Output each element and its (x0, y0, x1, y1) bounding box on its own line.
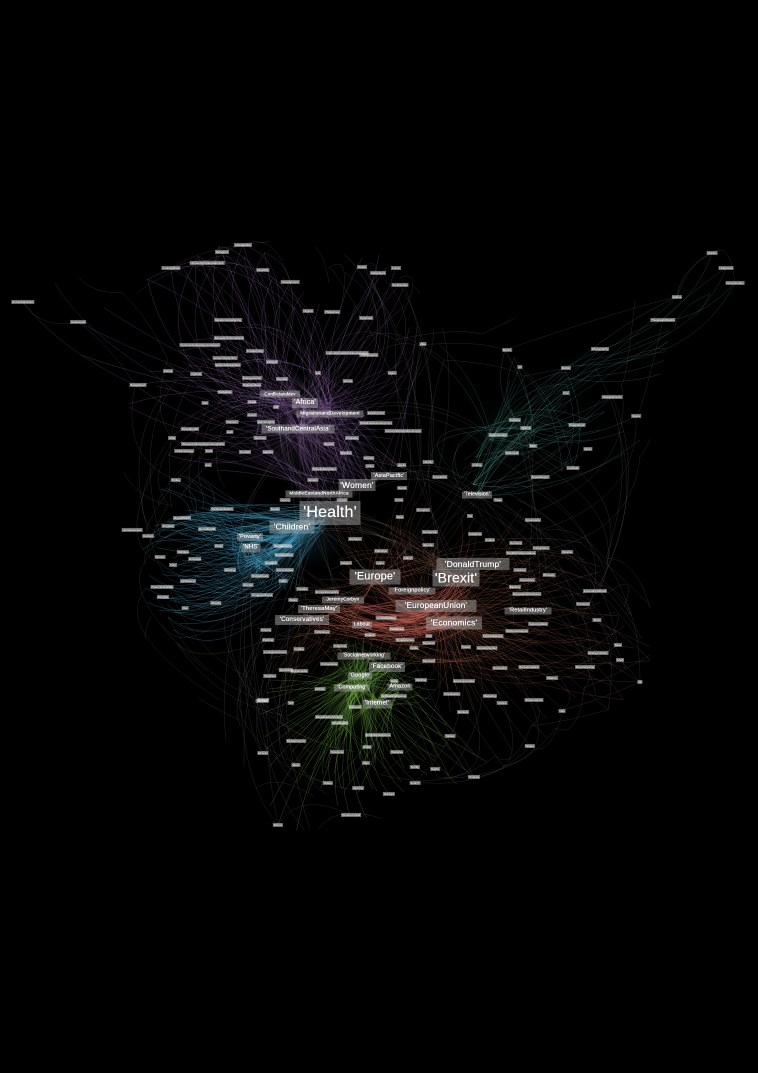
red cluster small labels: Bankofengland (519, 665, 539, 669)
label: RetailIndustry: 'RetailIndustry' (509, 608, 547, 614)
label: Children: 'Children' (274, 522, 310, 532)
green cluster small labels: Twitter (462, 645, 470, 649)
teal cluster small labels: Art (518, 365, 522, 369)
purple cluster small labels: Kenya (164, 369, 172, 373)
label: Poverty (237, 533, 263, 541)
label: Labour: Labour (354, 622, 370, 628)
purple cluster small labels: Inequality (346, 436, 358, 440)
red cluster small labels: Scottishindependence (507, 551, 535, 555)
red cluster small labels: Germany (510, 541, 522, 545)
red cluster small labels: Ukip (426, 634, 432, 638)
purple cluster small labels: Turkey (172, 478, 180, 482)
red cluster small labels: Brussels (543, 573, 555, 577)
label: Facebook (369, 662, 405, 672)
label: Amazon: Amazon (389, 684, 411, 690)
label: Internet (362, 700, 392, 708)
purple cluster small labels: Sustainabledevelopment (360, 421, 392, 425)
red cluster small labels: Financialsector (483, 634, 503, 638)
purple cluster small labels: Obesity (364, 456, 374, 460)
purple cluster small labels: Bangladesh (130, 383, 146, 387)
red cluster small labels: Catalonia (469, 532, 481, 536)
purple cluster small labels: Asylum (324, 442, 334, 446)
label: Poverty: 'Poverty' (239, 534, 261, 540)
green cluster small labels: Gaming (353, 786, 363, 790)
red cluster small labels: Marketing (484, 694, 496, 698)
purple cluster small labels: Mali (202, 401, 208, 405)
teal cluster small labels: Channel4 (506, 451, 518, 455)
teal cluster small labels: Theatreandtheatre (651, 318, 675, 322)
label: Africa (292, 398, 318, 408)
label: Google: 'Google' (349, 672, 371, 678)
purple cluster small labels: Democraticrepublicofcongo (385, 429, 421, 433)
purple cluster small labels: Pakistan (226, 420, 238, 424)
purple cluster small labels: Disability (257, 268, 269, 272)
teal cluster small labels: Culture (472, 463, 482, 467)
red cluster small labels: Europeancommission (513, 592, 541, 596)
purple cluster small labels: Childmarriage (175, 449, 193, 453)
teal cluster small labels: Hollywood (719, 266, 733, 270)
blue cluster small labels: Older (279, 579, 287, 583)
green cluster small labels: Data (391, 679, 397, 683)
red cluster small labels: Steel (615, 643, 621, 647)
blue cluster small labels: Alzheimers (181, 579, 195, 583)
purple cluster small labels: Humanrights (258, 420, 274, 424)
red cluster small labels: Manufacturing (576, 665, 594, 669)
green cluster small labels: Snapchat (334, 644, 346, 648)
red cluster small labels: Localgovernment (264, 650, 286, 654)
red cluster small labels: Privatisation (444, 692, 460, 696)
purple cluster small labels: Humanitarianism (12, 300, 34, 304)
blue cluster small labels: Unemployed (252, 574, 268, 578)
label: Socialnetworking (338, 652, 390, 660)
purple cluster small labels: Japan (398, 463, 406, 467)
red cluster small labels: Recession (493, 666, 507, 670)
purple cluster small labels: Vaccines (254, 436, 266, 440)
green cluster small labels: Videos (324, 781, 332, 785)
red cluster small labels: Nuclear (258, 698, 268, 702)
blue cluster small labels: Drugs (215, 544, 223, 548)
label: Computing: 'Computing' (337, 684, 367, 690)
purple cluster small labels: Family (271, 507, 279, 511)
purple cluster small labels: Cancer (337, 498, 347, 502)
label: AsiaPacific: 'AsiaPacific' (374, 473, 404, 479)
red cluster small labels: Housingmarket (477, 646, 497, 650)
red cluster small labels: Population (433, 475, 447, 479)
teal cluster small labels: Artanddesign (531, 475, 549, 479)
green cluster small labels: Artificialintelligence (366, 733, 390, 737)
label: EuropeanUnion: 'EuropeanUnion' (405, 601, 467, 610)
blue cluster small labels: Diet (182, 606, 188, 610)
red cluster small labels: Greenparty (526, 518, 540, 522)
red cluster small labels: Cycling (294, 647, 304, 651)
label: JeremyCorbyn (322, 596, 364, 604)
blue cluster small labels: Scotland (265, 561, 277, 565)
red cluster small labels: Wales (289, 598, 297, 602)
blue cluster small labels: Housing (225, 568, 235, 572)
label: Brexit: 'Brexit' (435, 570, 477, 586)
green cluster small labels: Virtualreality (332, 721, 348, 725)
red cluster small labels: Identity (423, 460, 433, 464)
green cluster small labels: Ebooks (258, 751, 268, 755)
red cluster small labels: Parliament (390, 627, 404, 631)
red cluster small labels: Shell (617, 658, 623, 662)
purple cluster small labels: Sexualhealth (182, 427, 198, 431)
red cluster small labels: Investing (514, 568, 526, 572)
teal cluster small labels: Fiction (562, 366, 570, 370)
purple cluster small labels: India (169, 436, 175, 440)
red cluster small labels: Lisbon (404, 556, 412, 560)
green cluster small labels: Hacking (416, 678, 426, 682)
red cluster small labels: Communications (506, 629, 528, 633)
label: Socialnetworking: 'Socialnetworking' (343, 652, 385, 658)
purple cluster small labels: Nigeria (303, 309, 313, 313)
purple cluster small labels: Refugees (216, 250, 228, 254)
blue cluster small labels: Doctors (143, 534, 153, 538)
label: Conservatives (275, 615, 329, 625)
edges: blue cluster (146, 480, 330, 631)
purple cluster small labels: Aid (316, 371, 320, 375)
red cluster small labels: Religion (341, 561, 351, 565)
purple cluster small labels: Iraq (206, 463, 210, 467)
purple cluster small labels: Congo (392, 266, 400, 270)
green cluster small labels: Gadgets (350, 705, 360, 709)
teal cluster small labels: Festivals (567, 466, 579, 470)
purple cluster small labels: Ethiopia (267, 360, 277, 364)
red cluster small labels: Stockmarkets (525, 698, 543, 702)
red cluster small labels: Palestine (375, 549, 387, 553)
red cluster small labels: Policing (263, 638, 273, 642)
red cluster small labels: Nuclearwar (423, 530, 437, 534)
red cluster small labels: Unions (498, 701, 506, 705)
label: Television: 'Television' (464, 492, 490, 498)
label: MigrationandDevelopment: MigrationandDevelopment (300, 412, 360, 416)
red cluster small labels: Terrorism (417, 508, 429, 512)
red cluster small labels: Theatre (297, 587, 307, 591)
red cluster small labels: Prisons (261, 628, 271, 632)
green cluster small labels: Microsoft (423, 659, 435, 663)
green cluster small labels: Onlineabuse (321, 662, 337, 666)
blue cluster small labels: Pharmaceuticals (151, 585, 173, 589)
label: Facebook: 'Facebook' (371, 663, 403, 670)
green cluster small labels: Websites (391, 750, 403, 754)
green cluster small labels: Retail (363, 745, 371, 749)
purple cluster small labels: Womensrightsandgenderequality (182, 442, 224, 446)
blue cluster small labels: Mentalhealth (174, 516, 190, 520)
purple cluster small labels: Nutrition (341, 451, 351, 455)
purple cluster small labels: Humanrightsdevelopment (191, 261, 223, 265)
purple cluster small labels: Nepal (248, 400, 256, 404)
purple cluster small labels: SchoolsEducation (312, 467, 336, 471)
edges: purple cluster (23, 245, 423, 510)
red cluster small labels: Migration (423, 641, 435, 645)
green cluster small labels: Startups (384, 792, 394, 796)
teal cluster small labels: Music (584, 447, 592, 451)
label: AsiaPacific (371, 472, 407, 480)
green cluster small labels: Spotify (411, 765, 419, 769)
label: Economics: 'Economics' (431, 618, 477, 628)
purple cluster small labels: Guatemala (71, 320, 85, 324)
green cluster small labels: Bitcoin (274, 823, 282, 827)
label: Conservatives: 'Conservatives' (280, 616, 324, 623)
label: Economics (426, 616, 482, 630)
red cluster small labels: Race (397, 515, 403, 519)
red cluster small labels: Employmentlaw (454, 679, 474, 683)
purple cluster small labels: Development (281, 280, 299, 284)
teal cluster small labels: Books (503, 348, 511, 352)
purple cluster small labels: Energyaccess (243, 376, 261, 380)
label: Internet: 'Internet' (365, 700, 389, 706)
red cluster small labels: Education (280, 668, 292, 672)
green cluster small labels: Digitalmedia (291, 669, 307, 673)
red cluster small labels: Tuitionfees (315, 630, 329, 634)
purple cluster small labels: China (366, 464, 374, 468)
green cluster small labels: Tablets (445, 734, 455, 738)
label: TheresaMay (298, 605, 340, 613)
purple cluster small labels: Foodsecurity (247, 349, 263, 353)
edges: teal cluster (420, 253, 735, 495)
red cluster small labels: Israel (376, 561, 384, 565)
teal cluster small labels: Photography (592, 347, 608, 351)
green cluster small labels: Mobilephones (287, 739, 305, 743)
teal cluster small labels: 'Drama' (521, 426, 531, 430)
red cluster small labels: Immigrationpolicy (316, 590, 338, 594)
green cluster small labels: Netflix (431, 767, 439, 771)
purple cluster small labels: Myanmar (360, 316, 372, 320)
green cluster small labels: Robots (315, 687, 325, 691)
label: Foreignpolicy (388, 588, 436, 594)
label: Europe (350, 570, 400, 584)
red cluster small labels: Energyindustry (588, 651, 608, 655)
green cluster small labels: Search (410, 781, 420, 785)
edges: red and pink hub arcs (300, 575, 480, 645)
green cluster small labels: YouTube (256, 699, 268, 703)
red cluster small labels: Tesco (593, 618, 601, 622)
teal cluster small labels: Opera (632, 414, 640, 418)
green cluster small labels: Smartphones (396, 638, 414, 642)
purple cluster small labels: Uganda (191, 372, 201, 376)
network edges (23, 242, 736, 830)
label: Health: 'Health' (303, 504, 357, 521)
purple cluster small labels: Internationalaidanddevelopment (326, 351, 368, 355)
teal cluster small labels: Drama (673, 295, 681, 299)
label: EuropeanUnion (396, 600, 476, 612)
purple cluster small labels: Governmentpolicy (213, 356, 237, 360)
green cluster small labels: Music (292, 763, 300, 767)
label: Foreignpolicy: 'Foreignpolicy' (393, 588, 431, 594)
red cluster small labels: Racial (398, 486, 406, 490)
blue cluster small labels: Socialwelfare (275, 553, 293, 557)
label: NHS (242, 544, 260, 552)
teal cluster small labels: Documentary (489, 433, 507, 437)
purple cluster small labels: Malaria (263, 450, 273, 454)
purple cluster small labels: Islam (389, 371, 395, 375)
label: Health (300, 501, 360, 525)
label: MiddleEastandNorthAfrica: MiddleEastandNorthAfrica (289, 492, 349, 496)
blue cluster small labels: Longtermillness (252, 593, 272, 597)
blue cluster small labels: Dentists (158, 595, 168, 599)
purple cluster small labels: Communitydevelopmentassets (180, 343, 220, 347)
purple cluster small labels: Somalia (277, 377, 287, 381)
purple cluster small labels: Haiti (227, 430, 233, 434)
green cluster small labels: Apple (410, 646, 418, 650)
purple cluster small labels: Sudan (358, 265, 366, 269)
label: Computing (334, 684, 370, 692)
infographic: topic network graph (11, 242, 745, 830)
edges: long grey links (23, 242, 735, 825)
label: SouthandCentralAsia (262, 424, 334, 434)
blue cluster small labels: Socialsecurity (274, 544, 292, 548)
label: DonaldTrump (436, 558, 510, 570)
teal cluster small labels: Pop (563, 391, 569, 395)
purple cluster small labels: Aidworkers (371, 271, 385, 275)
label: TheresaMay: 'TheresaMay' (301, 606, 337, 612)
teal cluster small labels: BBC (530, 444, 536, 448)
red cluster small labels: Inflation (547, 676, 557, 680)
red cluster small labels: Trade (494, 498, 502, 502)
blue cluster small labels: Nurses (155, 555, 165, 559)
red cluster small labels: Supermarkets (529, 622, 547, 626)
red cluster small labels: Internationaltrade (584, 589, 606, 593)
red cluster small labels: Tax (468, 514, 472, 518)
purple cluster small labels: Philippines (325, 310, 339, 314)
purple cluster small labels: Zika (420, 342, 426, 346)
purple cluster small labels: Waterandsanitation (216, 363, 240, 367)
blue cluster small labels: Alcohol (243, 583, 253, 587)
purple cluster small labels: Gendercampaigning (215, 318, 241, 322)
purple cluster small labels: Educationinternational (215, 336, 243, 340)
teal cluster small labels: Movies (707, 251, 717, 255)
label: Conflictanddevelopment: Conflictanddev (264, 392, 296, 396)
edges: additional density copies per cluster (55, 242, 710, 830)
blue cluster small labels: Communities (277, 568, 293, 572)
purple cluster small labels: Employment (368, 411, 384, 415)
purple cluster small labels: Globaljustice (235, 243, 251, 247)
red cluster small labels: Transport (577, 602, 589, 606)
red cluster small labels: Teachers (264, 674, 276, 678)
green cluster small labels: Wearabletechnology (316, 715, 342, 719)
blue cluster small labels: Mentalhealth (199, 527, 215, 531)
purple cluster small labels: Ageing (280, 498, 290, 502)
green cluster small labels: Artificialintelligence (382, 694, 406, 698)
green cluster small labels: Wifi (289, 701, 293, 705)
red cluster small labels: 'Russia' (423, 543, 433, 547)
label: NHS: 'NHS' (243, 544, 259, 550)
label: SouthandCentralAsia: 'SouthandCentralAsia' (266, 426, 330, 432)
red cluster small labels: Scottishpolitics (376, 616, 396, 620)
green cluster small labels: Telecoms (331, 750, 343, 754)
purple cluster small labels: Unicef (248, 413, 256, 417)
blue cluster small labels: Obesity (211, 601, 221, 605)
edges: green cluster (262, 640, 474, 825)
red cluster small labels: Ukraine (562, 550, 572, 554)
label: JeremyCorbyn: JeremyCorbyn (326, 598, 360, 602)
purple cluster small labels: Gender (308, 478, 318, 482)
purple cluster small labels: Southsudan (392, 283, 408, 287)
red cluster small labels: Oil (638, 680, 642, 684)
edges: orange cluster (270, 480, 640, 746)
blue cluster small labels: Medicalresearch (211, 507, 233, 511)
blue cluster small labels: Smoking (162, 524, 174, 528)
blue cluster small labels: Homelessness (123, 528, 141, 532)
label: Children (270, 520, 314, 534)
red cluster small labels: Politics (365, 633, 375, 637)
purple cluster small labels: Zimbabwe (218, 390, 232, 394)
red cluster small labels: Ireland (486, 538, 494, 542)
purple cluster small labels: Unitednations (243, 383, 261, 387)
teal cluster small labels: Documentary (726, 281, 744, 285)
label: DonaldTrump: 'DonaldTrump' (445, 559, 501, 569)
green cluster small labels: Youtube (469, 775, 479, 779)
red cluster small labels: Crime (395, 498, 403, 502)
purple cluster small labels: Aid (274, 405, 278, 409)
label: Africa: 'Africa' (294, 399, 316, 406)
purple cluster small labels: Transparency (360, 353, 378, 357)
red cluster small labels: Hinduism (349, 537, 361, 541)
red cluster small labels: Immigration (533, 546, 549, 550)
green cluster small labels: Venturecapital (342, 813, 360, 817)
label: Conflictanddevelopment (260, 390, 300, 398)
label: MiddleEastandNorthAfrica (286, 490, 352, 498)
label: RetailIndustry (504, 608, 552, 614)
red cluster small labels: Banking (510, 585, 520, 589)
purple cluster small labels: Foodaid (240, 450, 250, 454)
red cluster small labels: Currencies (520, 578, 534, 582)
purple cluster small labels: Cookingblogs (162, 266, 180, 270)
purple cluster small labels: Russia (344, 379, 352, 383)
purple cluster small labels: Syria (206, 449, 212, 453)
cluster glows (225, 370, 545, 740)
blue cluster small labels: Care (170, 563, 176, 567)
red cluster small labels: Markets (458, 710, 468, 714)
blue cluster small labels: Hospitals (189, 557, 201, 561)
teal cluster small labels: Classicalmusic (602, 395, 622, 399)
label: Women: 'Women' (340, 480, 374, 490)
teal cluster small labels: Comedy (510, 418, 520, 422)
red cluster small labels: Gas (559, 709, 565, 713)
label: Europe: 'Europe' (355, 570, 395, 582)
blue cluster small labels: Nutrition (178, 550, 188, 554)
red cluster small labels: Wages (526, 744, 534, 748)
green cluster small labels: Uber (363, 761, 369, 765)
teal cluster small labels: Popandrock (569, 423, 585, 427)
label: MigrationandDevelopment (296, 410, 364, 418)
